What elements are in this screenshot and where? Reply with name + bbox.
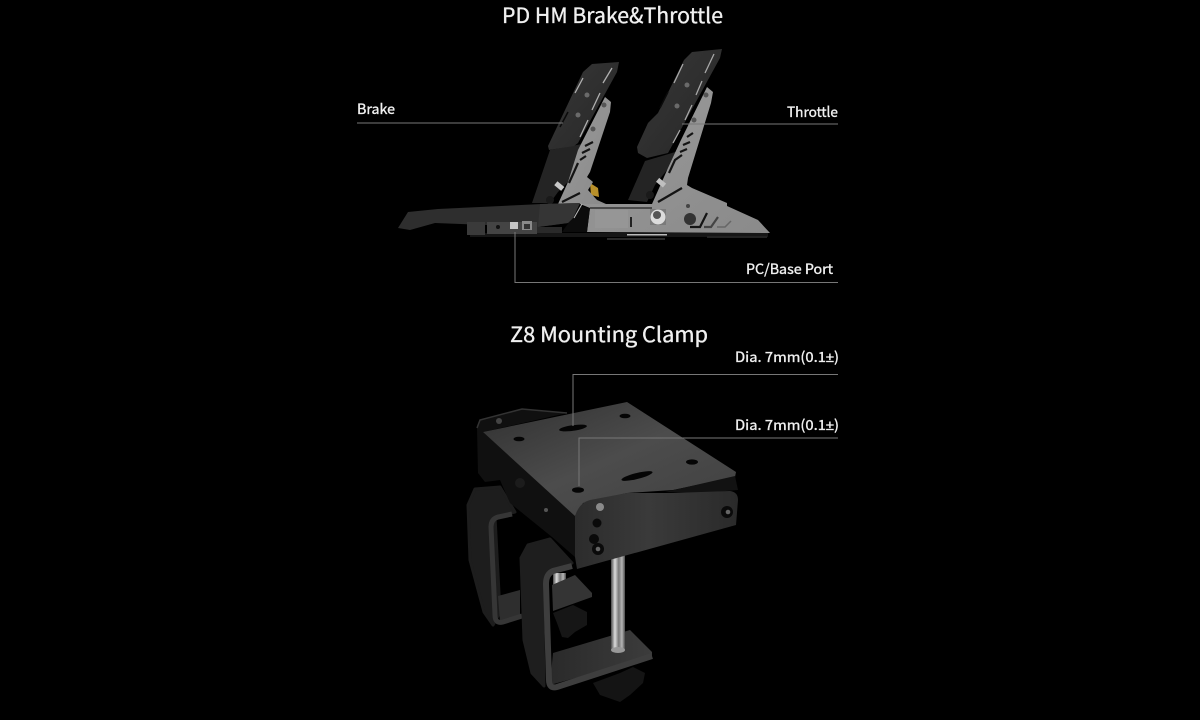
hole label 1: Dia. 7mm(0.1 ±) [735, 347, 839, 367]
throttle side plate and base [580, 87, 770, 233]
hole leader line 2 [579, 438, 838, 486]
base details [546, 92, 708, 228]
underside and rear plate [477, 409, 575, 557]
brake side plate [558, 97, 611, 204]
dark wedge [665, 476, 738, 493]
foot bar [398, 203, 580, 230]
front C bracket side [521, 539, 572, 686]
connector panel [467, 221, 562, 235]
illustration: brake and throttle pedals [398, 49, 770, 240]
lower knob [593, 667, 645, 702]
brake rear arm [532, 144, 582, 203]
throttle label: Throttle [787, 102, 838, 122]
top plate [483, 402, 736, 516]
throttle rear arm [628, 150, 682, 202]
underside details [496, 418, 548, 512]
yellow spring [590, 183, 599, 197]
front bracket rim [546, 566, 652, 687]
foot bar silver edge [574, 204, 582, 218]
base top edge [590, 207, 652, 209]
title: pedals: PD HM Brake&Throttle [502, 0, 723, 30]
rear C bracket [468, 487, 522, 625]
base shadow [470, 233, 768, 240]
PC/Base Port label: PC/Base Port [746, 259, 834, 279]
brake leader line [357, 122, 563, 124]
clamp rod [611, 555, 625, 653]
throttle pedal plate [637, 49, 722, 158]
front side plate [575, 491, 738, 569]
upper knob [553, 605, 587, 638]
throttle leader line [682, 123, 838, 125]
hole leader line 1 [573, 374, 838, 426]
brake label: Brake [357, 99, 395, 119]
upper pad [552, 575, 592, 611]
foot bar highlight [538, 203, 580, 227]
PC/Base Port leader line [515, 232, 838, 282]
threaded rod [553, 573, 566, 593]
brake pedal plate [548, 62, 619, 150]
hole label 2: Dia. 7mm(0.1 ±) [735, 415, 839, 435]
lower jaw [550, 630, 652, 685]
front plate fasteners [589, 503, 733, 555]
illustration: mounting clamp [468, 402, 738, 702]
side plate slots [562, 133, 731, 227]
title: clamp: Z8 Mounting Clamp [510, 319, 708, 349]
rear plate top edge [477, 409, 567, 428]
top plate holes [514, 414, 698, 493]
base front dark recess [562, 206, 590, 232]
